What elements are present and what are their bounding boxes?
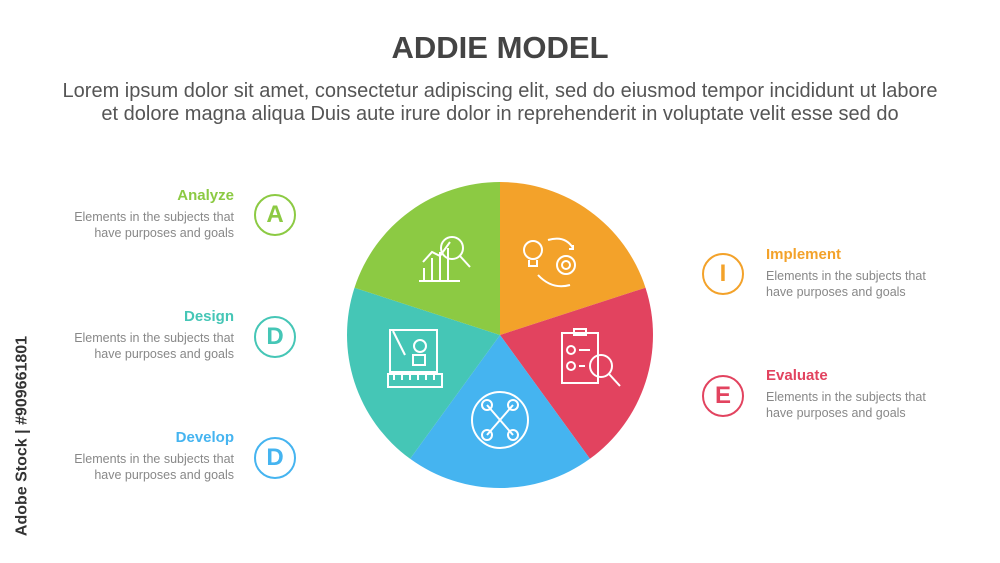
text: have purposes and goals xyxy=(94,347,234,361)
slice: implement xyxy=(500,182,646,335)
text: have purposes and goals xyxy=(94,226,234,240)
icon: checklist search xyxy=(562,329,620,386)
text: Elements in the subjects that xyxy=(74,452,234,466)
text: I xyxy=(720,260,726,287)
text: A xyxy=(266,201,284,228)
text: Design xyxy=(184,308,234,325)
text: Implement xyxy=(766,246,841,263)
item: analyze xyxy=(74,187,296,240)
item: develop xyxy=(74,429,296,482)
title: ADDIE MODEL xyxy=(392,30,608,65)
text: Analyze xyxy=(177,187,234,204)
slice: develop xyxy=(410,335,590,488)
text: have purposes and goals xyxy=(94,468,234,482)
text: Elements in the subjects that xyxy=(74,210,234,224)
subtitle xyxy=(63,80,937,125)
item: evaluate xyxy=(702,367,926,420)
text: have purposes and goals xyxy=(766,406,906,420)
text: E xyxy=(715,382,731,409)
text: Evaluate xyxy=(766,367,828,384)
icon: blueprint xyxy=(388,330,442,387)
text: D xyxy=(266,323,284,350)
icon: tools cycle xyxy=(472,392,528,448)
slice: analyze xyxy=(354,182,500,335)
text: Elements in the subjects that xyxy=(766,390,926,404)
item: implement xyxy=(702,246,926,299)
slice: design xyxy=(347,288,500,459)
text: Elements in the subjects that xyxy=(74,331,234,345)
icon: analysis chart xyxy=(419,237,470,281)
text: have purposes and goals xyxy=(766,285,906,299)
icon: idea gear xyxy=(524,239,575,286)
text: D xyxy=(266,444,284,471)
text: Elements in the subjects that xyxy=(766,269,926,283)
slice: evaluate xyxy=(500,288,653,459)
subtitle: et dolore magna aliqua Duis aute irure dolor in reprehenderit in voluptate velit esse sed do xyxy=(101,103,899,125)
subtitle: Lorem ipsum dolor sit amet, consectetur adipiscing elit, sed do eiusmod tempor incididunt ut labore xyxy=(63,80,937,102)
watermark side text: Adobe Stock | #909661801 xyxy=(14,336,30,536)
text: Develop xyxy=(176,429,234,446)
item: design xyxy=(74,308,296,361)
